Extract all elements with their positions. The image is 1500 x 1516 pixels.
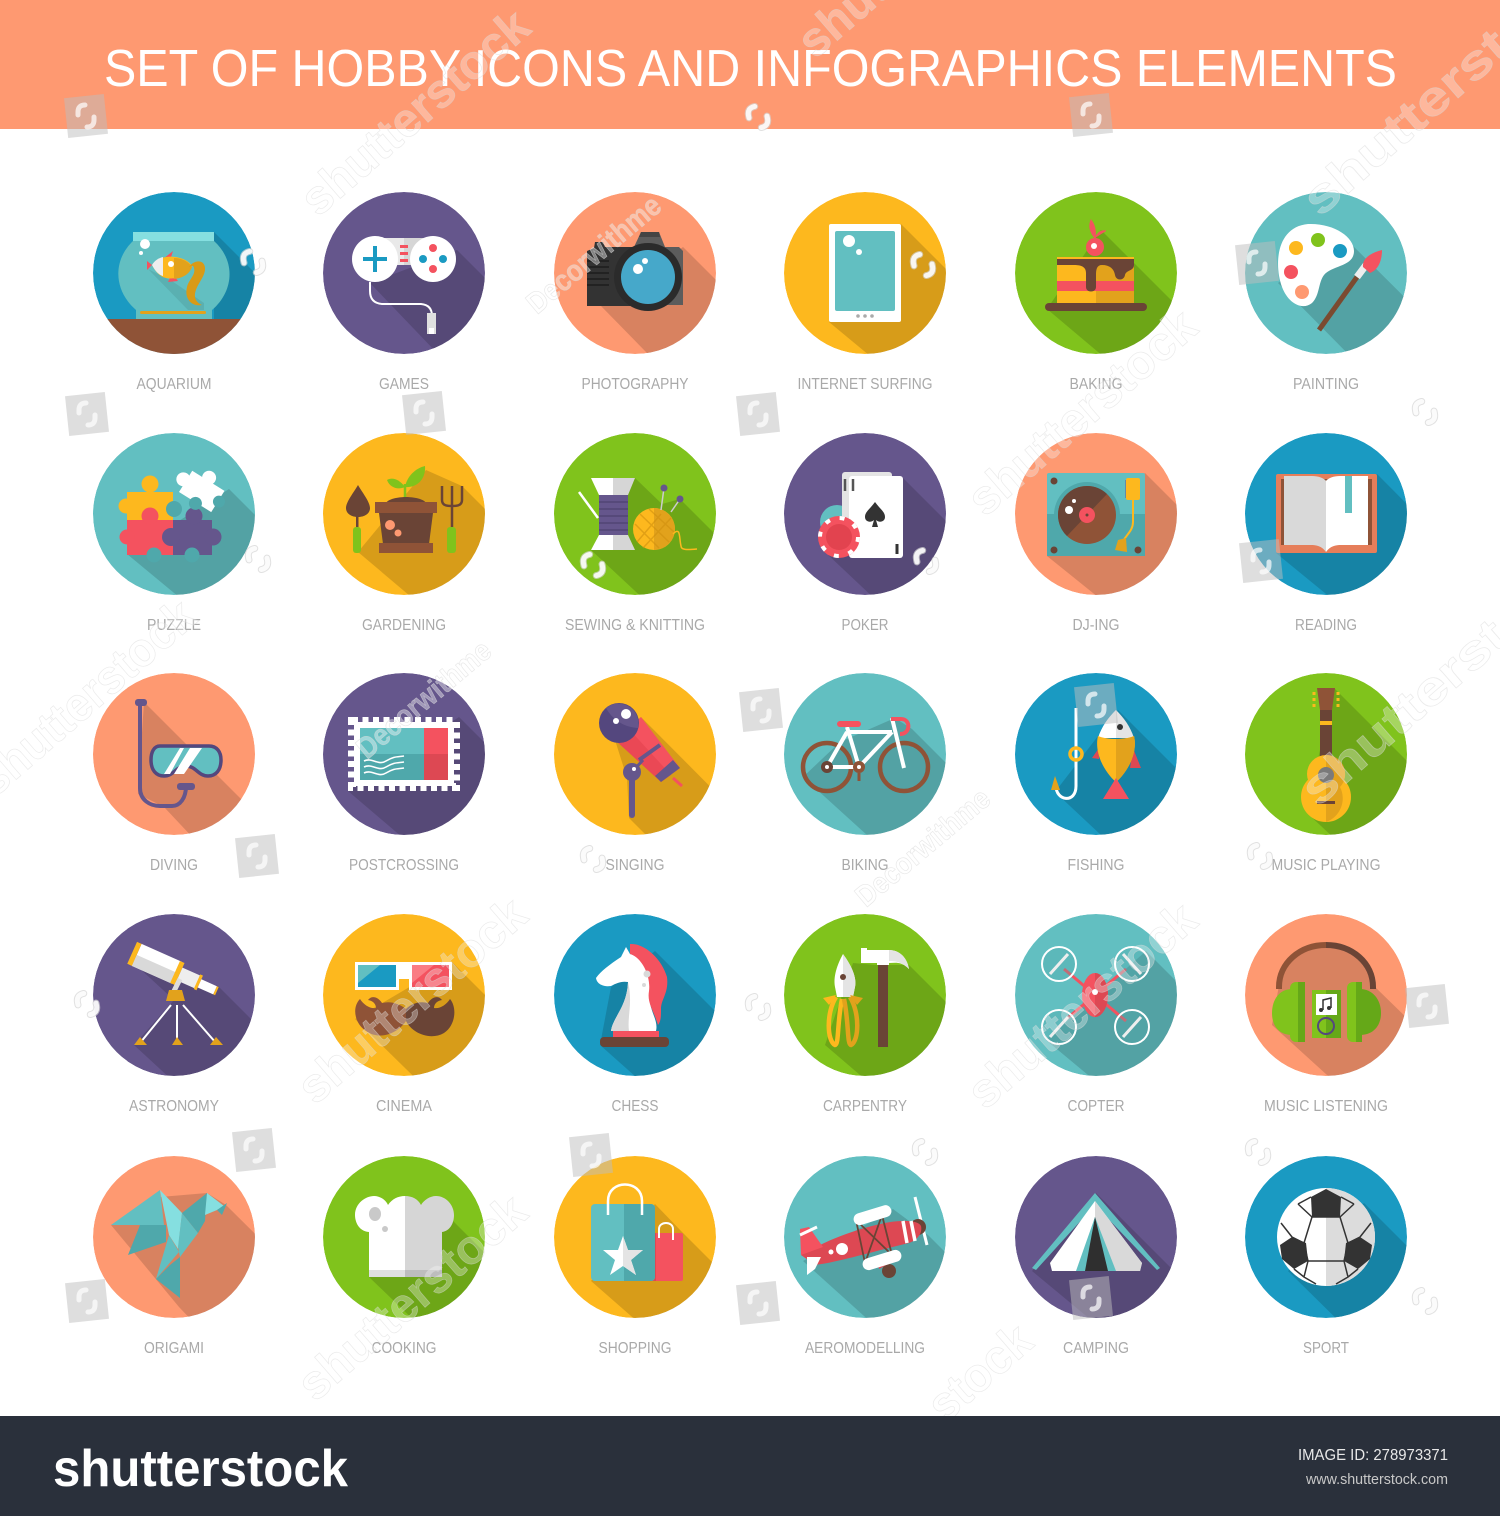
icon: headphones and player [1245, 914, 1496, 1165]
watermark text: Decorwithme [849, 782, 997, 913]
label: dj-ing: DJ-ING [1072, 617, 1120, 634]
icon: postage stamp [323, 673, 485, 835]
watermark text: stock [917, 1313, 1043, 1432]
label: postcrossing: POSTCROSSING [349, 857, 459, 874]
icon: cards and chips [784, 433, 946, 595]
label: fishing: FISHING [1068, 857, 1124, 874]
website: www.shutterstock.com [1305, 1471, 1448, 1488]
icon: soccer ball [1245, 1156, 1496, 1407]
icon: game controller [323, 192, 485, 354]
panel: biking [784, 673, 946, 870]
label: games: GAMES [379, 376, 429, 393]
footer logo: shutterstock [53, 1440, 348, 1498]
icon: chef hat [323, 1156, 574, 1407]
icon: 3D glasses and mustache [323, 914, 485, 1076]
icon: tent [1015, 1156, 1266, 1407]
panel: dj-ing [1015, 433, 1177, 630]
panel: photography [554, 192, 716, 389]
icon: cake [1015, 192, 1177, 354]
icon: origami bird [93, 1156, 344, 1407]
label: diving: DIVING [150, 857, 198, 874]
icon: turntable [1015, 433, 1177, 595]
icon: plant pot and tools [323, 433, 485, 595]
icon: shopping bags [554, 1156, 805, 1407]
panel: origami [93, 1156, 344, 1407]
panel: cinema [323, 914, 485, 1111]
label: camping: CAMPING [1063, 1340, 1129, 1357]
watermark text: shutterst [1290, 609, 1500, 816]
icon: biplane [784, 1156, 1035, 1407]
panel: singing [554, 673, 716, 870]
label: copter: COPTER [1068, 1098, 1124, 1115]
panel: reading [1245, 433, 1407, 630]
label: poker: POKER [842, 617, 888, 634]
label: cooking: COOKING [372, 1340, 436, 1357]
panel: music listening [1245, 914, 1496, 1165]
label: biking: BIKING [842, 857, 888, 874]
footer bar [0, 1416, 1500, 1516]
label: sewing and knitting: SEWING & KNITTING [565, 617, 705, 634]
label: aquarium: AQUARIUM [136, 376, 212, 393]
icon: bicycle [784, 673, 946, 835]
label: internet surfing: INTERNET SURFING [798, 376, 932, 393]
panel: aeromodelling [784, 1156, 1035, 1407]
label: music listening: MUSIC LISTENING [1264, 1098, 1388, 1115]
label: baking: BAKING [1070, 376, 1122, 393]
panel: poker [784, 433, 946, 630]
watermark text: shutterstock [957, 892, 1208, 1119]
icon: guitar [1245, 673, 1407, 835]
icon: hook and fish [1015, 673, 1177, 835]
panel: astronomy [93, 914, 255, 1111]
watermark text: Decorwithme [350, 634, 498, 765]
label: origami: ORIGAMI [144, 1340, 204, 1357]
label: aeromodelling: AEROMODELLING [805, 1340, 925, 1357]
label: singing: SINGING [606, 857, 664, 874]
panel: sport [1245, 1156, 1496, 1407]
label: sport: SPORT [1303, 1340, 1349, 1357]
panel: gardening [323, 433, 485, 630]
label: carpentry: CARPENTRY [823, 1098, 907, 1115]
panel: diving [93, 673, 255, 870]
label: chess: CHESS [612, 1098, 658, 1115]
icon: microphone [554, 673, 716, 835]
label: reading: READING [1295, 617, 1357, 634]
title: SET OF HOBBY ICONS AND INFOGRAPHICS ELEMENTS [104, 40, 1397, 98]
panel: camping [1015, 1156, 1266, 1407]
panel: chess [554, 914, 805, 1165]
watermark text: shutterstock [287, 1184, 538, 1411]
watermark text: shutterst [1292, 19, 1500, 226]
label: cinema: CINEMA [376, 1098, 433, 1115]
icon: aquarium [93, 192, 255, 354]
watermark text: shutterstock [957, 299, 1208, 526]
icon: open book [1245, 433, 1407, 595]
watermark text: shutterstock [287, 887, 538, 1114]
watermark logos [64, 93, 1449, 1325]
label: painting: PAINTING [1293, 376, 1359, 393]
icon: palette and brush [1245, 192, 1407, 354]
image id: IMAGE ID: 278973371 [1298, 1447, 1448, 1464]
icon: telescope [93, 914, 255, 1076]
icon: camera [554, 192, 716, 354]
icon: pliers and hammer [784, 914, 1035, 1165]
label: puzzle: PUZZLE [147, 617, 201, 634]
icon: snorkel and mask [93, 673, 255, 835]
panel: music playing [1245, 673, 1407, 870]
panel: shopping [554, 1156, 805, 1407]
panel: sewing and knitting [554, 433, 716, 630]
label: astronomy: ASTRONOMY [129, 1098, 219, 1115]
panel: aquarium [93, 192, 255, 392]
panel: painting [1245, 192, 1407, 389]
panel: games [323, 192, 485, 389]
icon: chess knight [554, 914, 805, 1165]
icon: puzzle pieces [93, 433, 255, 595]
label: gardening: GARDENING [362, 617, 446, 634]
label: photography: PHOTOGRAPHY [582, 376, 688, 393]
icon: quadcopter drone [1015, 914, 1266, 1165]
label: shopping: SHOPPING [598, 1340, 672, 1357]
header banner [0, 0, 1500, 129]
watermark text: shutterstock [290, 0, 541, 226]
panel: fishing [1015, 673, 1177, 870]
icon: tablet [784, 192, 946, 354]
panel: copter [1015, 914, 1266, 1165]
panel: baking [1015, 192, 1177, 389]
label: music playing: MUSIC PLAYING [1272, 857, 1380, 874]
watermark text: Decorwithme [520, 189, 668, 320]
panel: carpentry [784, 914, 1035, 1165]
panel: cooking [323, 1156, 574, 1407]
icon: spool and yarn [554, 433, 716, 595]
panel: internet surfing [784, 192, 946, 389]
panel: postcrossing [323, 673, 485, 870]
panel: puzzle [93, 433, 255, 630]
